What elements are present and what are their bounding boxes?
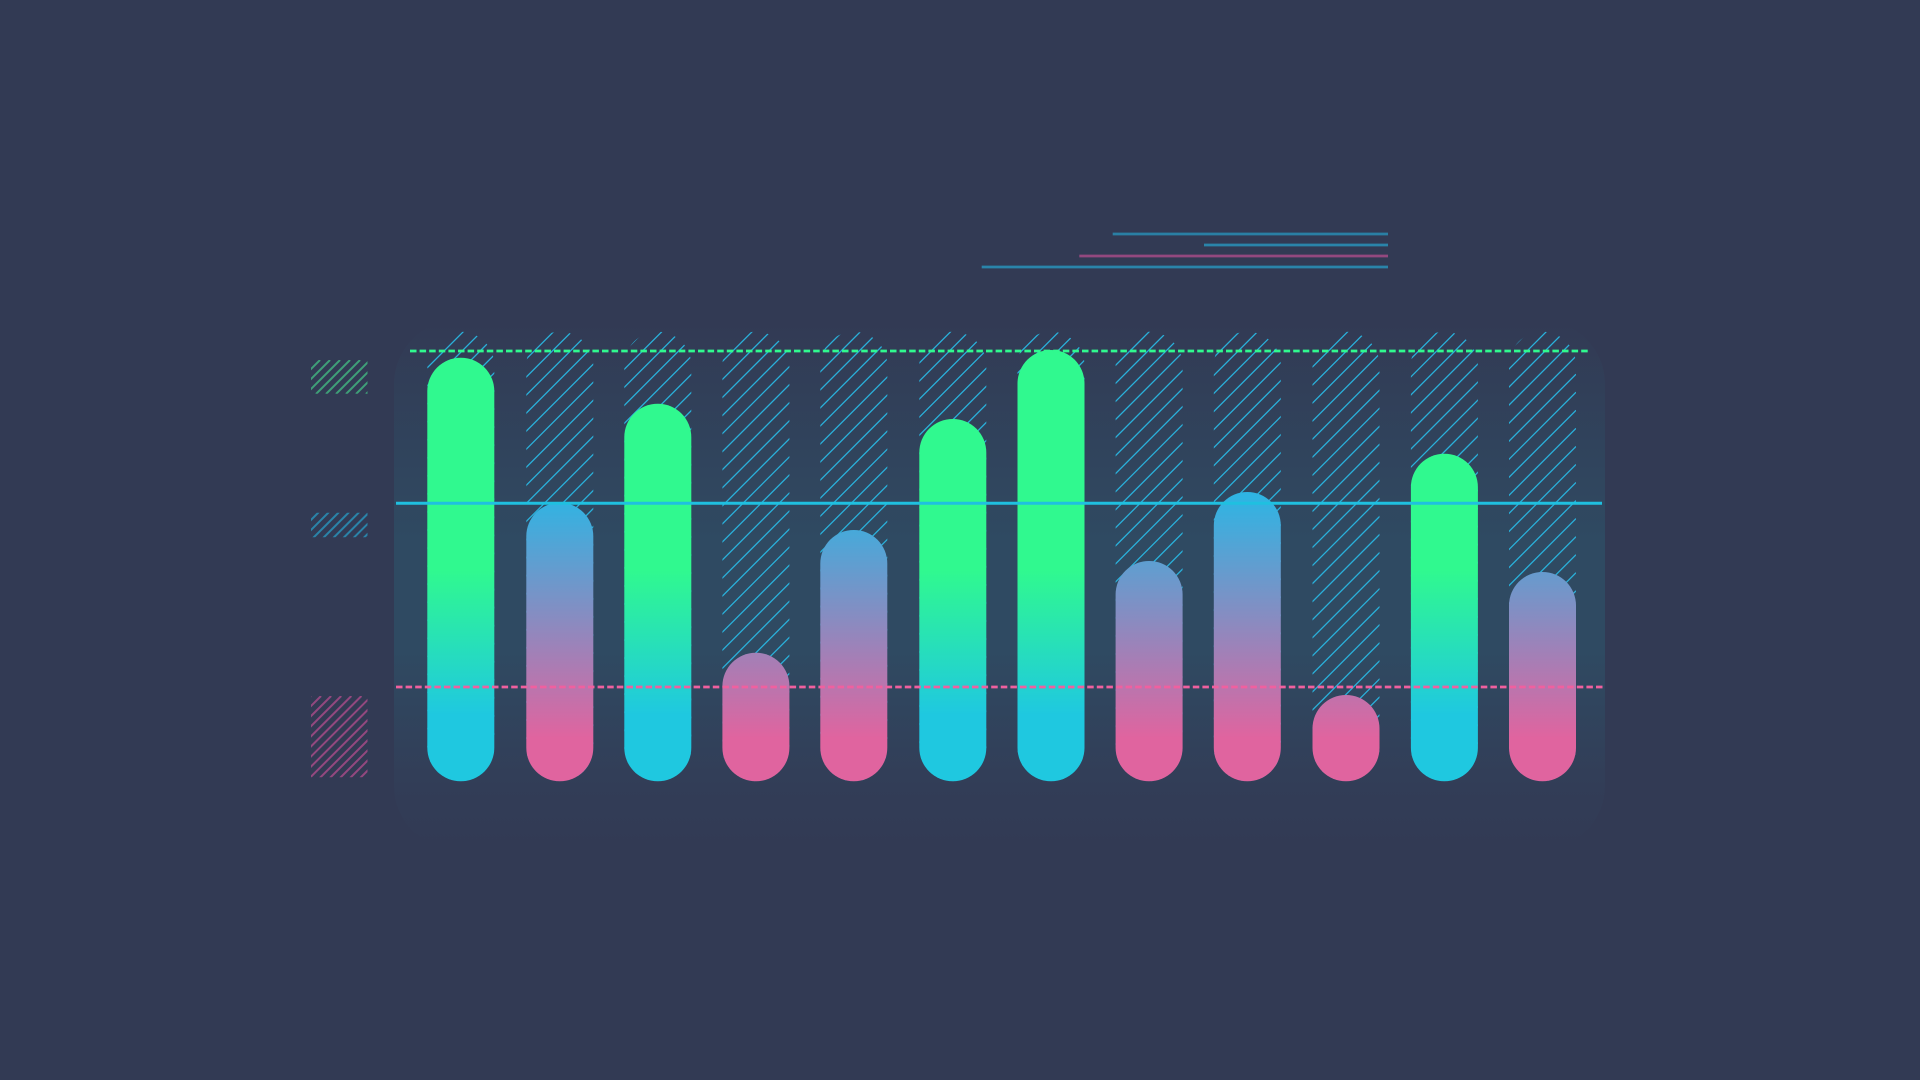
infographic canvas xyxy=(311,232,1605,782)
bar 10 xyxy=(1312,695,1380,781)
swatch: pink xyxy=(311,696,368,778)
pink dashed lower threshold xyxy=(396,686,1603,688)
blue average line xyxy=(396,502,1602,505)
bars xyxy=(427,350,1576,781)
green dashed upper threshold xyxy=(410,350,1589,352)
bar 11 xyxy=(1411,454,1478,781)
legend swatches xyxy=(311,360,368,778)
bar 8 xyxy=(1116,561,1183,781)
bar 1 xyxy=(427,358,494,781)
chart panel xyxy=(394,320,1605,850)
top reference lines xyxy=(982,234,1388,267)
bar 2 xyxy=(526,503,593,781)
hatched tracks xyxy=(427,331,1576,781)
swatch: blue xyxy=(311,512,368,538)
bar 12 xyxy=(1509,572,1576,781)
bar 7 xyxy=(1018,350,1084,781)
bar 9 xyxy=(1214,492,1281,781)
bar 3 xyxy=(624,404,691,781)
bar 4 xyxy=(722,653,789,781)
bar 5 xyxy=(820,530,887,781)
bar 6 xyxy=(919,419,986,781)
swatch: green xyxy=(311,360,368,394)
